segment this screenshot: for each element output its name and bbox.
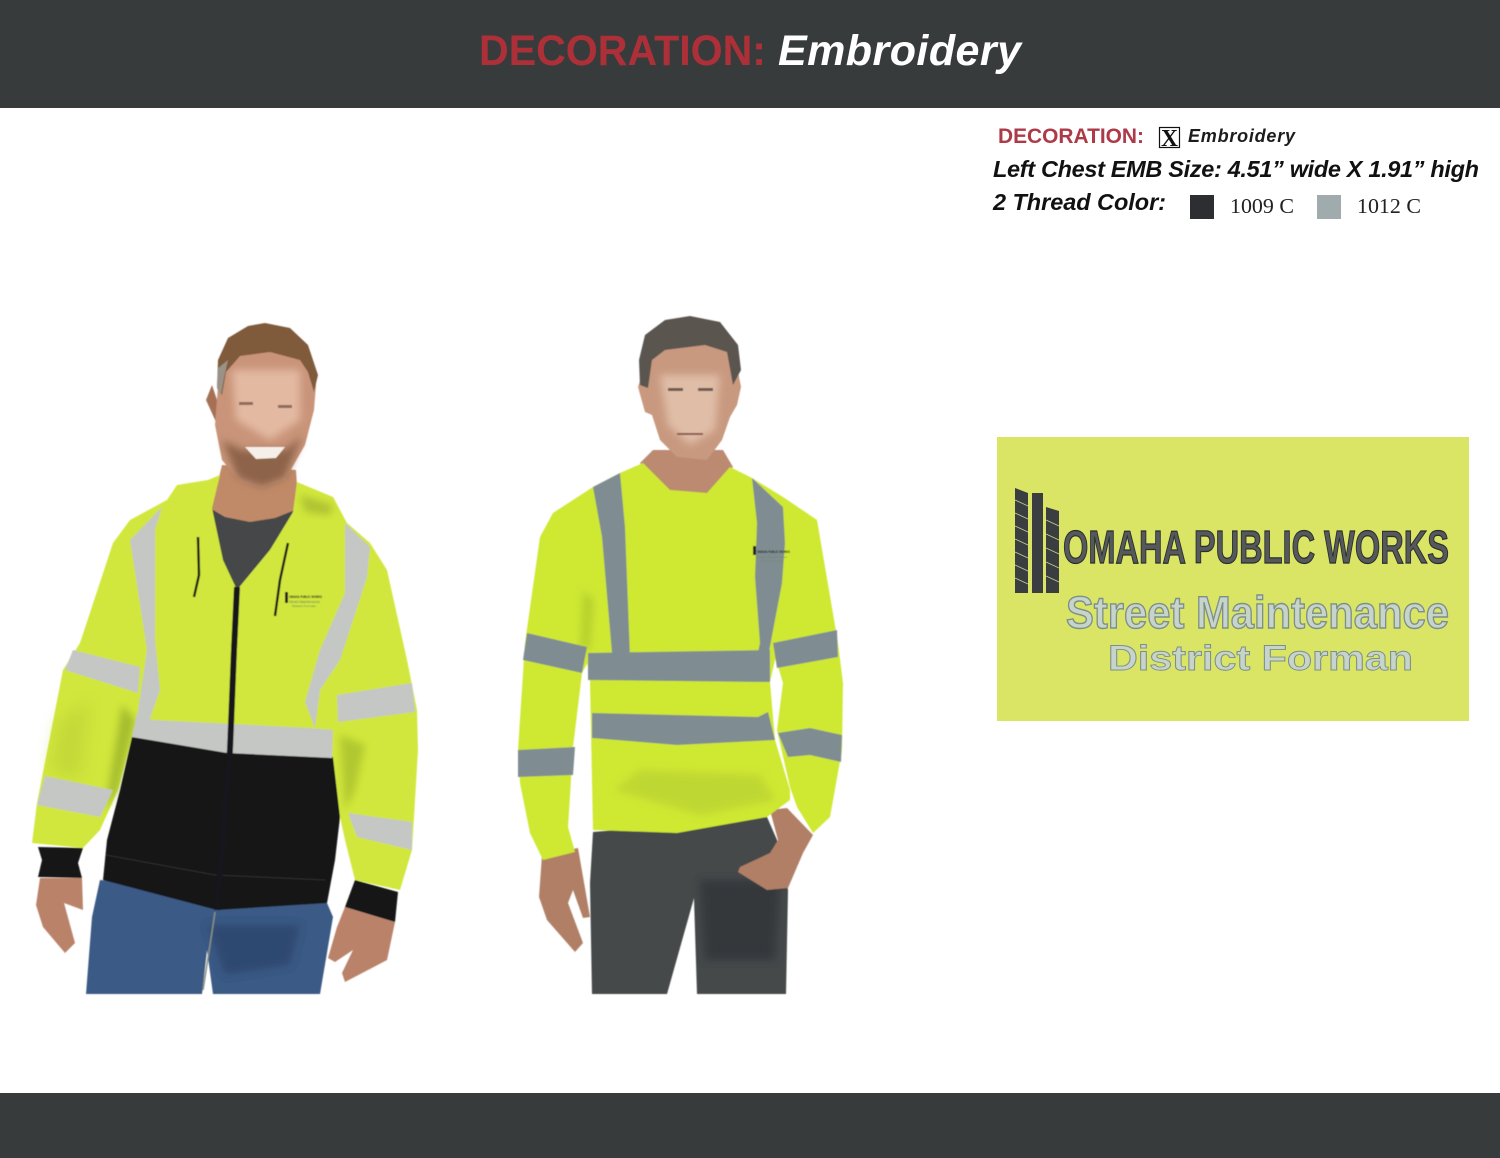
checked box: X [1161,126,1179,152]
title: DECORATION: [479,27,766,75]
swatch 1009 C [1190,194,1294,219]
neck and head [638,316,741,500]
shirt torso [585,463,790,833]
reflective tape [518,473,842,777]
photo: man in hi-vis long sleeve shirt [518,316,843,994]
jeans [86,880,333,994]
reflective tape [37,507,415,850]
drawstrings [194,537,288,616]
decoration specification block [992,124,1479,219]
swatch 1012 C [1317,194,1421,219]
hands [36,878,395,982]
chest logo on shirt: District Forman [761,559,784,563]
dark t-shirt [208,507,295,590]
title: Embroidery [778,27,1023,75]
shirt yellow shell [518,463,843,860]
decoration label: DECORATION: [998,124,1144,148]
embroidery option: Embroidery [1188,126,1296,146]
footer band [0,1093,1500,1158]
size line: Left Chest EMB Size: 4.51” wide X 1.91” high [993,156,1479,182]
hoodie cuffs [38,847,398,922]
chest logo on hoodie: OMAHA PUBLIC WORKS [289,594,322,599]
embroidery close-up patch [997,437,1469,721]
chest logo on hoodie [285,592,322,608]
chest logo on hoodie: Street Maintenance [289,600,320,604]
hoodie yellow shell [32,475,418,890]
header band [0,0,1500,108]
chest logo on shirt: OMAHA PUBLIC WORKS [757,550,790,554]
pants [590,817,788,994]
chest logo on hoodie: District Forman [292,604,316,608]
hoodie black lower panel [103,737,340,910]
shirt right sleeve [773,497,843,833]
neck and head [205,323,318,545]
photo: man in hi-vis zip hoodie [32,323,418,994]
logo line: Street Maintenance: Street Maintenance [1066,587,1449,638]
logo line: District Forman: District Forman [1108,639,1413,678]
hands [539,808,813,952]
swatch 1009 C: 1009 C [1230,194,1294,218]
zipper [217,587,237,910]
shirt left sleeve [518,487,600,860]
chest logo on shirt [753,546,790,563]
swatch 1012 C: 1012 C [1357,194,1421,218]
logo icon: three building bars [1015,488,1059,593]
thread color label: 2 Thread Color: [992,189,1166,215]
chest logo on shirt: Street Maintenance [757,555,787,559]
